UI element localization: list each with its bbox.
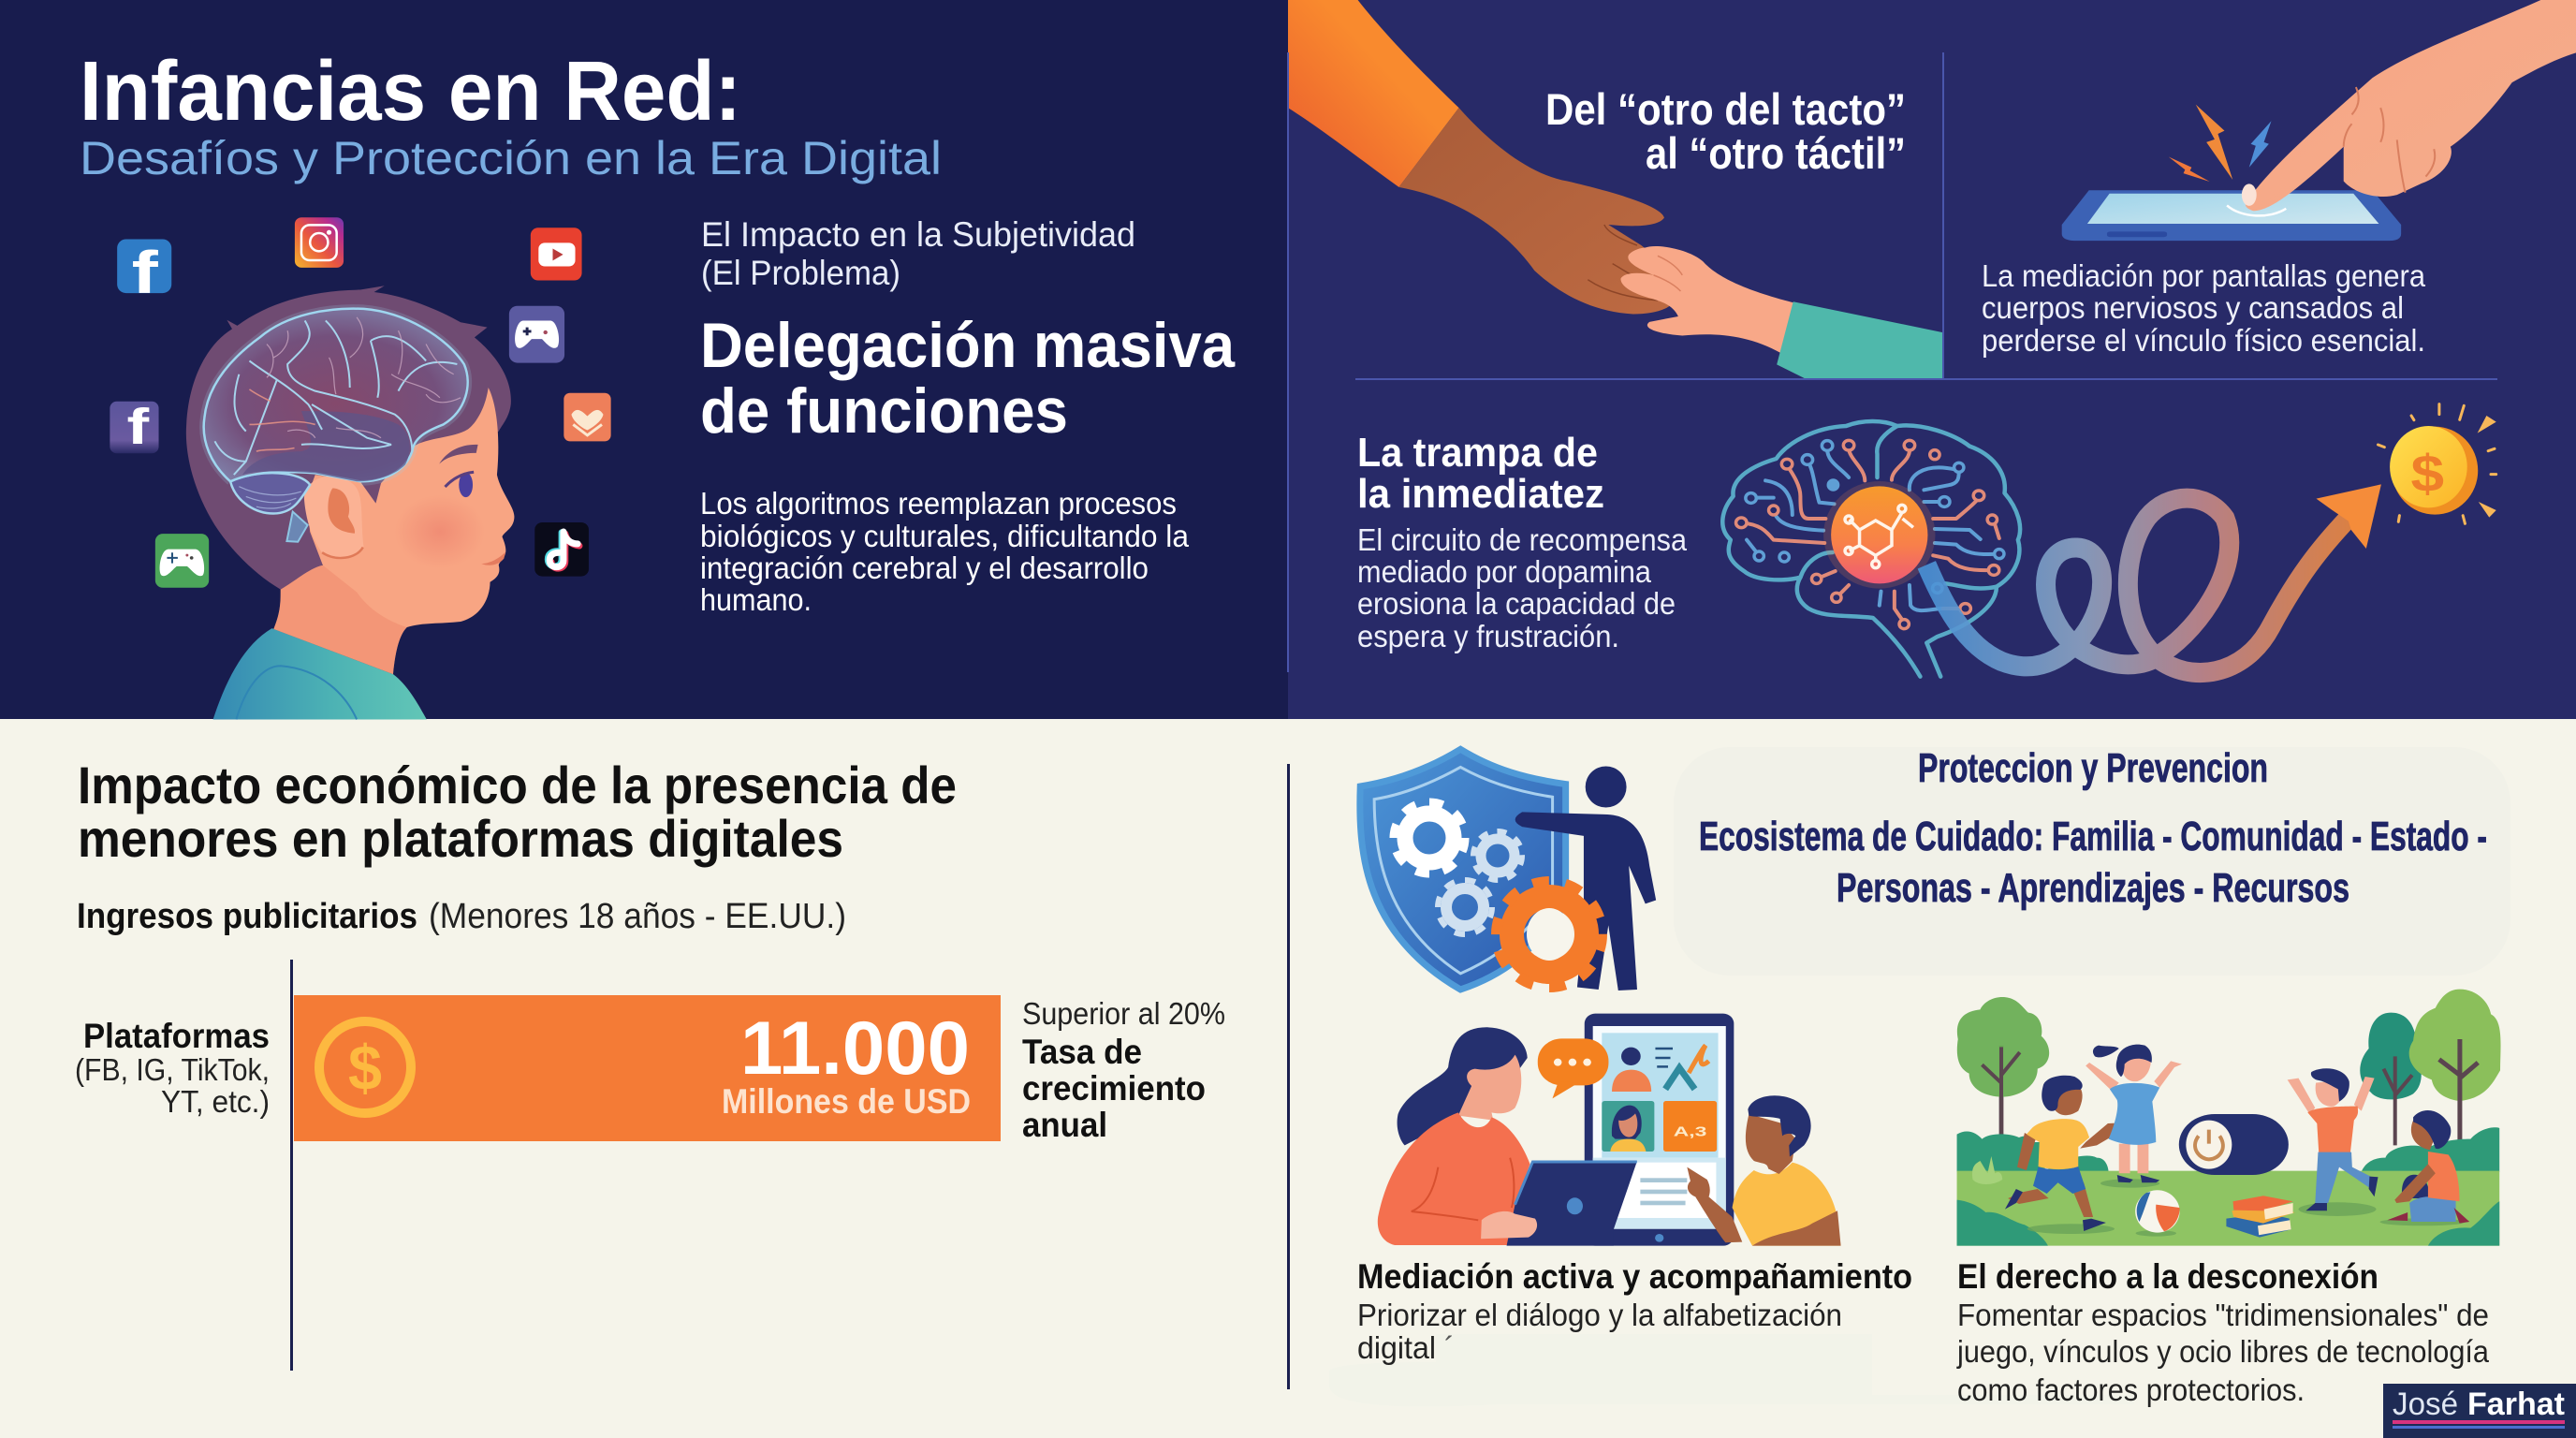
- hair: [186, 286, 511, 590]
- boy running: [2005, 1076, 2121, 1231]
- big tablet: [1585, 1014, 1734, 1246]
- bushes back: [1957, 1127, 2499, 1172]
- cheek blush: [395, 495, 485, 568]
- panel: economic impact: [75, 756, 1225, 1371]
- text: section label: (El Problema): [701, 254, 900, 292]
- heading: la trampa de la inmediatez: La trampa de: [1357, 430, 1598, 476]
- text: screens description: La mediación por pantallas genera: [1982, 258, 2426, 293]
- icon: orange app: [564, 393, 611, 441]
- growth note: Tasa de: [1022, 1033, 1142, 1071]
- child hand: [1620, 246, 1793, 353]
- boy face: [1746, 1114, 1795, 1174]
- text: algorithm description: biológicos y culturales, dificultando la: [700, 519, 1190, 553]
- face and neck: [273, 388, 514, 674]
- text: disconnect heading: El derecho a la desconexión: [1957, 1257, 2378, 1296]
- tablet: [2062, 190, 2401, 241]
- text: algorithm description: [700, 486, 1190, 617]
- text: disconnect description: [1956, 1298, 2490, 1407]
- ear lower shadow: [322, 547, 363, 558]
- tablet screen: [1593, 1026, 1726, 1229]
- orange sleeve: [1288, 0, 1459, 187]
- value unit: Millones de USD: [722, 1082, 971, 1121]
- arrowhead: [2316, 484, 2381, 549]
- woman face: [1458, 1055, 1521, 1121]
- heading: la trampa de la inmediatez: [1357, 430, 1604, 517]
- illustration: adult and child hands: [1288, 0, 1942, 379]
- knuckle lines: [2344, 87, 2435, 193]
- laptop: [1507, 1162, 1637, 1246]
- text: dopamine description: erosiona la capacidad de: [1357, 586, 1676, 621]
- lightning orange small: [2169, 157, 2210, 182]
- text: disconnect description: juego, vínculos y ocio libres de tecnología: [1956, 1334, 2490, 1369]
- boy jumping: [2288, 1068, 2378, 1211]
- background: top left navy panel: [0, 0, 1288, 719]
- text: dopamine description: mediado por dopamina: [1357, 554, 1652, 589]
- speech bubble: [1538, 1038, 1608, 1098]
- category label: (FB, IG, TikTok,: [75, 1052, 270, 1087]
- grass: [1957, 1171, 2499, 1246]
- logo: José Farhat: Farhat: [2467, 1387, 2565, 1422]
- lightning orange large: [2196, 105, 2232, 180]
- icon: facebook blue: f: [132, 239, 158, 306]
- finger nail: [2242, 183, 2257, 206]
- icon: youtube: [531, 227, 582, 281]
- background: bottom cream panel: [0, 719, 2576, 1438]
- person: [1515, 812, 1656, 990]
- heading: la trampa de la inmediatez: la inmediatez: [1357, 471, 1604, 517]
- eyebrow: [439, 445, 478, 464]
- tree green right: [2409, 990, 2501, 1145]
- text: algorithm description: humano.: [700, 582, 812, 617]
- molecule: [1845, 505, 1913, 568]
- profile icon: [1612, 1048, 1651, 1092]
- cerebellum: [230, 473, 310, 513]
- warm brain veins: [249, 389, 315, 451]
- growth note: crecimiento: [1022, 1069, 1206, 1108]
- inner ear: [328, 488, 355, 534]
- title: Infancias en Red:: [80, 45, 741, 139]
- background: top right indigo panel: [1288, 0, 2576, 719]
- boy hair: [1748, 1095, 1811, 1157]
- mouth: [481, 551, 505, 565]
- panel: protection and prevention: [1329, 745, 2510, 1407]
- text: screens description: cuerpos nerviosos y cansados al: [1982, 290, 2404, 325]
- neck shadow: [273, 565, 407, 674]
- girl in dress: [2086, 1045, 2182, 1182]
- heading: delegación masiva: [700, 310, 1236, 447]
- heading: delegación masiva: de funciones: [700, 375, 1068, 447]
- adult hand: [1398, 108, 1675, 315]
- text: mediation description: digital: [1357, 1330, 1436, 1365]
- text: mediation description: Priorizar el diálogo y la alfabetización: [1357, 1298, 1842, 1332]
- heading: impacto económico: Impacto económico de la presencia de: [78, 756, 957, 814]
- text: dopamine description: [1357, 522, 1688, 653]
- tree dark right: [2360, 1013, 2422, 1145]
- tablet screen top: [1602, 1033, 1719, 1158]
- logo: José Farhat: José: [2393, 1387, 2458, 1422]
- eye: [459, 473, 473, 497]
- text: section label: El Impacto en la Subjetividad: [701, 215, 1135, 254]
- illustration: active mediation: [1378, 1014, 1841, 1246]
- boy shirt: [1733, 1163, 1841, 1246]
- category label: YT, etc.): [161, 1084, 270, 1119]
- photo tile: [1602, 1101, 1654, 1152]
- axis: [290, 960, 293, 1371]
- icon: facebook purple: f: [127, 399, 150, 455]
- divider between bottom panels: [1287, 764, 1290, 1389]
- subheading: ingresos publicitarios: [77, 897, 846, 936]
- tablet button: [2107, 231, 2167, 237]
- logo: José Farhat: [2383, 1384, 2576, 1438]
- circuit nodes coral: [1736, 440, 1999, 629]
- text: dopamine description: espera y frustración.: [1357, 619, 1619, 653]
- heading: del otro del tacto: Del “otro del tacto”: [1545, 84, 1906, 134]
- text: disconnect description: Fomentar espacios "tridimensionales" de: [1957, 1298, 2489, 1332]
- adult finger lines: [1588, 225, 1658, 301]
- shirt seam: [236, 666, 357, 719]
- value: 11.000: [740, 1006, 970, 1091]
- menu lines: [1655, 1049, 1673, 1066]
- ear: [304, 476, 364, 559]
- tablet screen: [2087, 194, 2378, 224]
- teal sleeve: [1777, 301, 1942, 379]
- callout: ecosystem of care: [1674, 745, 2510, 976]
- icon: facebook purple: [110, 399, 159, 455]
- heading: del otro del tacto: [1545, 84, 1906, 178]
- callout background: [1674, 747, 2510, 976]
- icon: dollar coin: [319, 1021, 411, 1113]
- callout title: Proteccion y Prevencion: [1918, 745, 2268, 791]
- divider lines in top right panel: [1287, 52, 2497, 672]
- text: mediation heading: Mediación activa y acompañamiento: [1357, 1257, 1912, 1296]
- gear orange hole: [1527, 908, 1572, 961]
- heading: delegación masiva: Delegación masiva: [700, 310, 1236, 381]
- orange bar: [294, 995, 1001, 1141]
- ground shadows: [2027, 1179, 2465, 1237]
- laptop dot: [1567, 1197, 1583, 1214]
- orange tile: [1663, 1101, 1717, 1152]
- text: section label: [701, 215, 1135, 292]
- letter A shape: [1665, 1068, 1695, 1089]
- gear light top: [1473, 831, 1522, 880]
- icon: dollar coin: $: [348, 1033, 382, 1104]
- hand pointing: [2246, 0, 2576, 211]
- callout line two: Personas - Aprendizajes - Recursos: [1837, 865, 2349, 911]
- touch ripple: [2227, 205, 2286, 215]
- shield inner line: [1374, 767, 1553, 974]
- subtitle: Desafíos y Protección en la Era Digital: [80, 132, 942, 184]
- shield: [1360, 749, 1566, 990]
- woman hand: [1481, 1211, 1537, 1239]
- dark lower lobe: [242, 411, 410, 481]
- illustration: right to disconnect: [1957, 990, 2501, 1246]
- brain outline: [1722, 421, 2020, 677]
- text: algorithm description: integración cerebral y el desarrollo: [700, 550, 1149, 585]
- heading: impacto económico: menores en plataformas digitales: [78, 809, 843, 868]
- panel: problem / impact on subjectivity: [80, 45, 1236, 719]
- cerebrum: [204, 309, 468, 481]
- cerebellum ridges: [239, 487, 301, 508]
- content lines: [1640, 1178, 1687, 1205]
- growth note: Superior al 20%: [1022, 996, 1225, 1031]
- icon: gamepad green: [155, 534, 209, 588]
- icon: instagram: [295, 217, 344, 268]
- subheading: ingresos publicitarios: (Menores 18 años - EE.UU.): [429, 897, 846, 936]
- heading: impacto económico: [78, 756, 957, 868]
- brain stem: [286, 512, 308, 542]
- lightning blue: [2249, 121, 2271, 168]
- text: dopamine description: El circuito de recompensa: [1357, 522, 1688, 557]
- growth note: anual: [1022, 1106, 1107, 1144]
- coin dollar sign: $: [2410, 445, 2444, 503]
- orange tile: A,3: [1674, 1124, 1706, 1139]
- coin sparkle rays: [2378, 404, 2496, 523]
- child finger lines: [1654, 256, 1682, 291]
- text: mediation description: ´: [1444, 1330, 1455, 1365]
- sweater fold: [1412, 1158, 1514, 1220]
- gear white: [1394, 802, 1465, 873]
- books: [2226, 1196, 2295, 1238]
- beach ball: [2135, 1190, 2180, 1233]
- bar chart: [75, 960, 1225, 1371]
- dopamine orb: [1831, 486, 1927, 583]
- growth note: [1022, 996, 1225, 1144]
- woman hair: [1398, 1027, 1528, 1145]
- bush corners: [1957, 1200, 2499, 1246]
- coin face: [2390, 426, 2467, 507]
- text: disconnect description: como factores protectorios.: [1957, 1372, 2305, 1407]
- boy arm: [1687, 1167, 1742, 1242]
- coin sparkle arrows: [2478, 416, 2496, 518]
- spiral ribbon: [1926, 498, 2349, 673]
- heading: del otro del tacto: al “otro táctil”: [1646, 128, 1906, 178]
- text: screens description: perderse el vínculo físico esencial.: [1982, 323, 2425, 358]
- category label: [75, 1017, 270, 1119]
- category label: Plataformas: [83, 1017, 270, 1055]
- boy forearm: [1752, 1211, 1841, 1246]
- circuit lines coral: [1741, 448, 1999, 624]
- circuit nodes blue: [1746, 441, 2004, 593]
- fine brain folds: [267, 317, 461, 438]
- shirt: [213, 628, 427, 719]
- illustration: boy with brain profile: [110, 217, 611, 719]
- power toggle: [2179, 1114, 2289, 1175]
- gear orange: [1497, 882, 1602, 987]
- icon: facebook blue: [117, 239, 171, 306]
- text: mediation description: [1357, 1298, 1842, 1365]
- icon: gamepad purple: [509, 306, 564, 363]
- tablet lower panel: [1593, 1158, 1726, 1229]
- illustration: circuit brain, ribbon, coin: [1722, 404, 2496, 677]
- brain folds: [214, 320, 457, 475]
- orange glyph: [1689, 1046, 1709, 1073]
- text: screens description: [1982, 258, 2426, 358]
- small plant: [1972, 1156, 2002, 1184]
- coin edge: [2392, 427, 2478, 515]
- text: algorithm description: Los algoritmos reemplazan procesos: [700, 486, 1177, 521]
- brain glow: [204, 309, 468, 481]
- gear light bottom: [1438, 880, 1492, 934]
- woman sweater: [1378, 1112, 1530, 1245]
- illustration: finger on tablet: [2062, 0, 2576, 241]
- tree left: [1957, 997, 2049, 1142]
- dopamine orb glow: [1823, 481, 1935, 589]
- subheading: ingresos publicitarios: Ingresos publicitarios: [77, 897, 417, 936]
- panel: touch and tactile other: [1288, 0, 2576, 677]
- faint erased patch: [1329, 1334, 2134, 1406]
- boy seated: [2387, 1110, 2469, 1224]
- icon: shield with gears and figure: [1360, 749, 1656, 990]
- laptop edge: [1515, 1162, 1637, 1205]
- circuit lines blue: [1747, 449, 1999, 610]
- eyelid: [445, 472, 474, 487]
- tablet home button: [1655, 1234, 1663, 1242]
- icon: tiktok: [534, 522, 589, 577]
